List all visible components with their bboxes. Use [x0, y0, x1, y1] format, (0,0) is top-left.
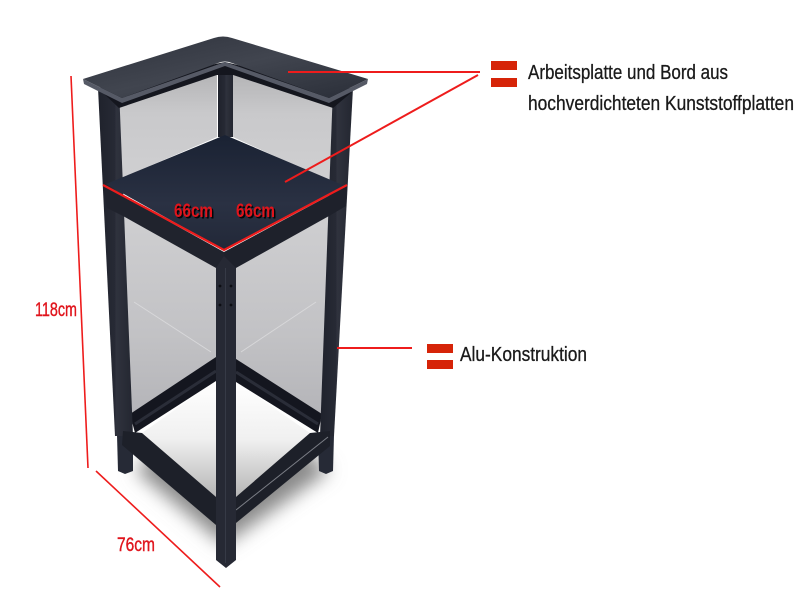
- icon: equals mark frame: [427, 344, 453, 369]
- label: material top: [528, 62, 794, 115]
- dimension: depth: 76cm: [117, 535, 155, 556]
- feet: [117, 435, 334, 474]
- left post: [98, 88, 133, 436]
- shelf highlight: [224, 137, 226, 245]
- lower front rails: [122, 431, 330, 525]
- floor shadow: [135, 395, 330, 545]
- upper glass panels: [108, 75, 342, 187]
- floor opening: [142, 381, 310, 497]
- icon: equals mark top: [491, 61, 517, 87]
- dimension: width right: 66cm: [238, 202, 276, 224]
- lower back rails: [130, 357, 322, 433]
- label: material top: Arbeitsplatte und Bord aus: [528, 62, 728, 84]
- dimension: width right: 66cm: [236, 201, 275, 222]
- label: frame: Alu-Konstruktion: [460, 344, 587, 366]
- dimension: width left: 66cm: [176, 202, 214, 224]
- dimension: height: 118cm: [35, 300, 77, 321]
- dimension lines: [71, 76, 347, 587]
- lower glass panels: [118, 212, 333, 416]
- upper frame rails: [103, 185, 347, 276]
- countertop: [83, 36, 368, 103]
- front post: [216, 256, 236, 568]
- under-counter band: [98, 62, 352, 108]
- dimension: width left: 66cm: [174, 201, 213, 222]
- right post: [320, 88, 353, 436]
- bolt holes: [219, 285, 232, 306]
- counter structure: [83, 36, 368, 568]
- shelf board: [106, 135, 345, 250]
- back post upper: [218, 68, 233, 137]
- leader lines: top and shelf: [285, 72, 480, 182]
- leader line: frame: [337, 347, 412, 349]
